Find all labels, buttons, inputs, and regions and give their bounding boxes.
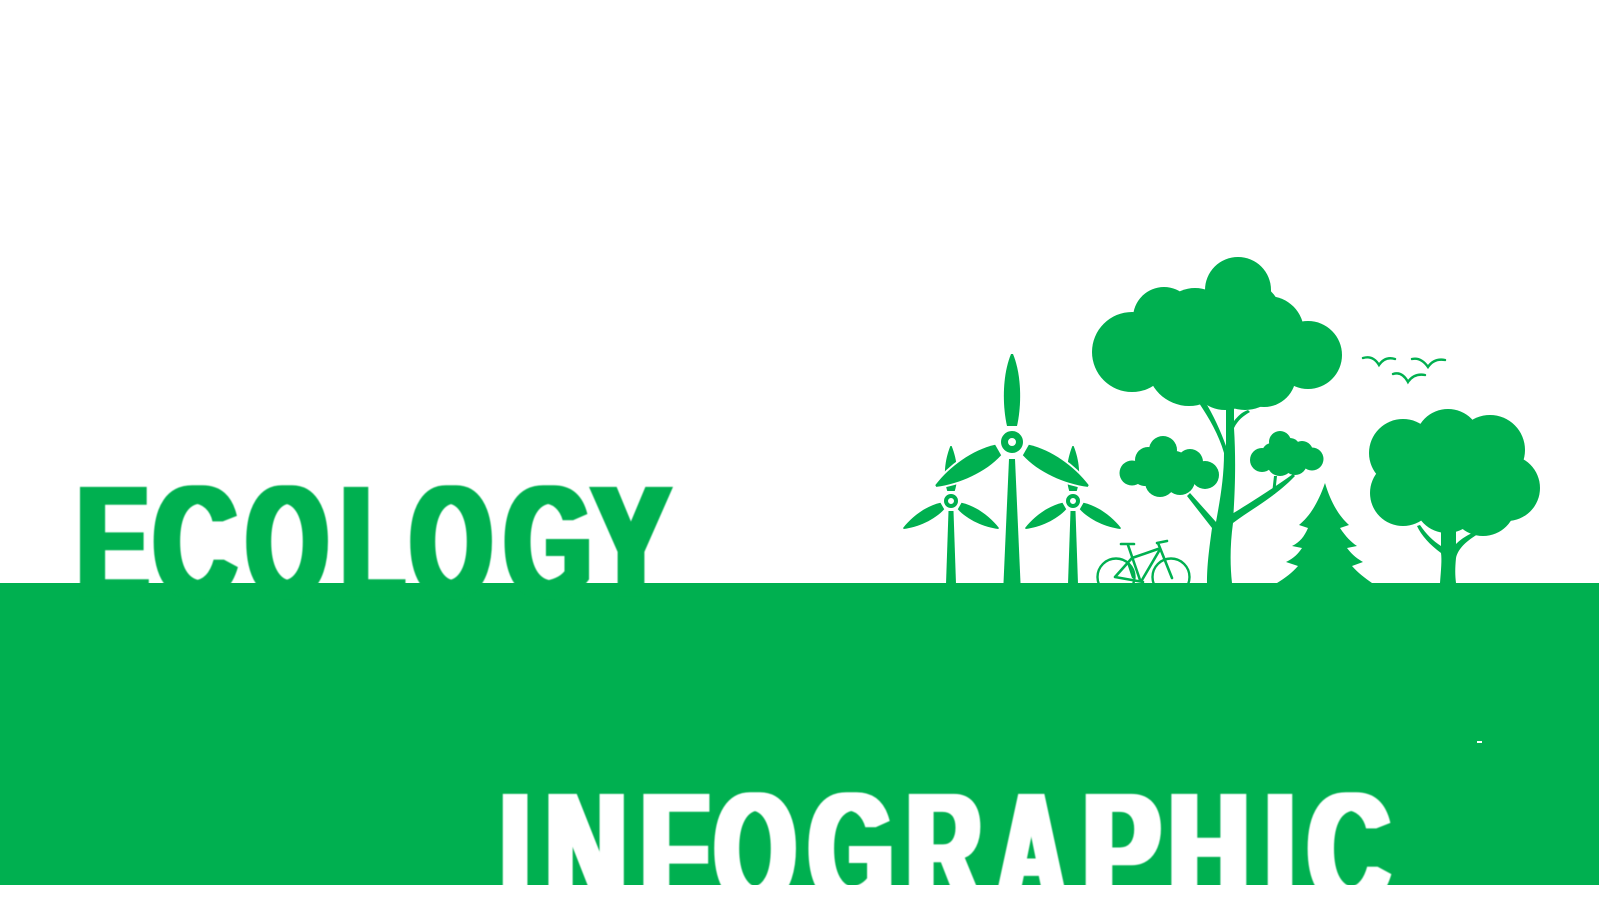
icon: large wind turbine — [931, 354, 1093, 583]
icon: small bush right — [1250, 431, 1324, 494]
heading: ECOLOGY: O — [411, 452, 491, 631]
heading: ECOLOGY — [78, 452, 674, 631]
icon: birds — [1363, 357, 1445, 382]
small white dash — [1477, 741, 1482, 743]
icon: small bush left — [1120, 436, 1219, 497]
heading: ECOLOGY: O — [247, 452, 327, 631]
heading: ECOLOGY: L — [342, 452, 404, 631]
icon: small wind turbine right — [1022, 446, 1124, 584]
green ground band — [0, 583, 1599, 885]
heading: ECOLOGY: C — [154, 452, 236, 631]
icon: small wind turbine left — [900, 446, 1002, 584]
icon: big tree — [1092, 257, 1342, 583]
heading: ECOLOGY: Y — [592, 452, 670, 631]
heading: ECOLOGY: E — [78, 452, 148, 631]
icon: right tree — [1369, 409, 1540, 583]
icon: pine tree — [1277, 483, 1372, 583]
icon: bicycle — [1098, 541, 1190, 596]
heading: ECOLOGY: G — [504, 452, 590, 631]
heading: INFOGRAPHIC — [501, 759, 1392, 900]
